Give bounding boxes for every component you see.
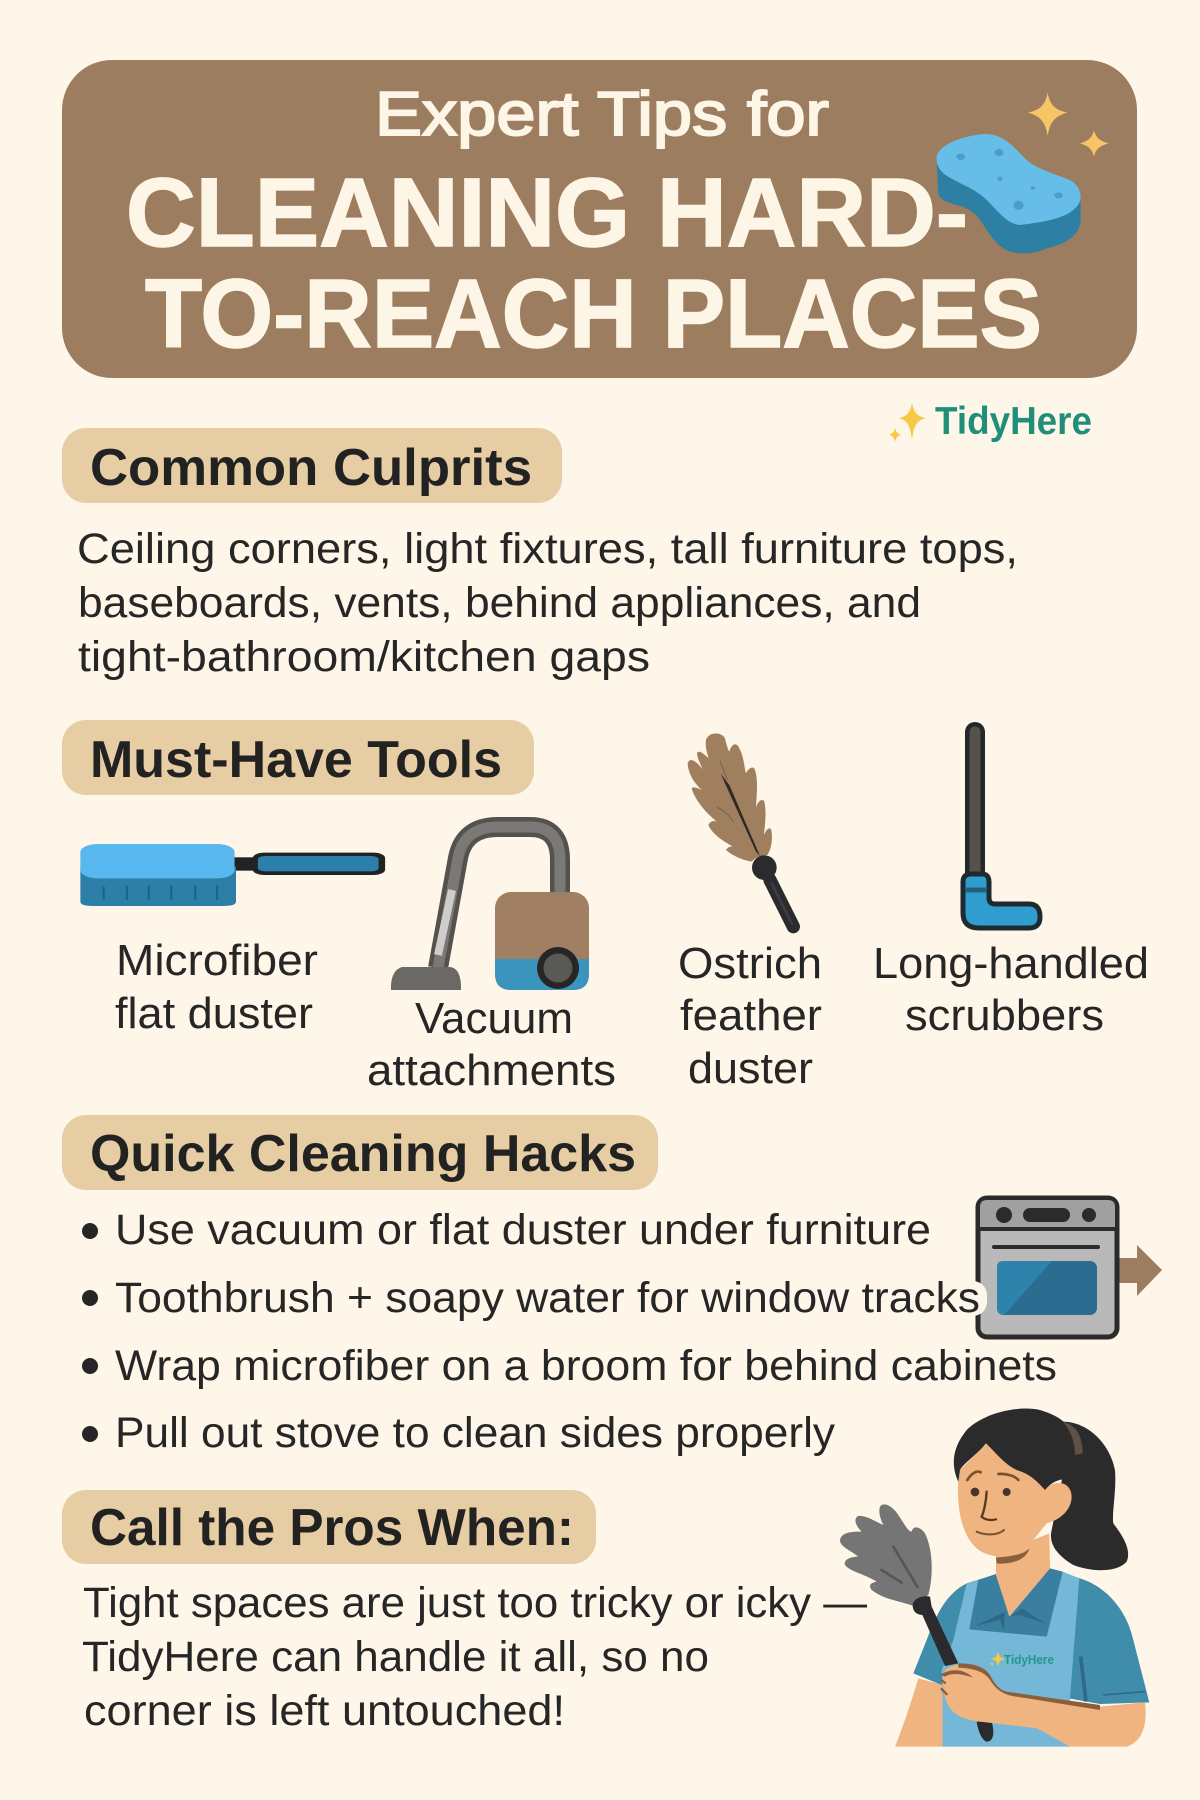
panel: quick cleaning hacks (62, 1115, 1162, 1457)
text: culprits list: Ceiling corners, light fixtures, tall furniture tops, (77, 525, 1018, 573)
title banner (62, 60, 1137, 378)
icon: oven with arrow (978, 1198, 1162, 1337)
text: call the pros body: Tight spaces are just too tricky or icky — (83, 1579, 867, 1627)
logo: TidyHere: TidyHere (935, 400, 1092, 443)
illustration: cleaner with feather duster (840, 1409, 1149, 1747)
list: quick hacks: Use vacuum or flat duster under furniture (115, 1206, 931, 1254)
text: culprits list: tight-bathroom/kitchen gaps (78, 633, 650, 681)
heading: common culprits (62, 428, 562, 503)
heading: quick cleaning hacks: Quick Cleaning Hacks (90, 1125, 636, 1183)
label: long-handled scrubbers (873, 939, 1149, 1040)
label: vacuum attachments: attachments (367, 1046, 616, 1095)
panel: call the pros (62, 1490, 867, 1735)
text: call the pros body: corner is left untouched! (84, 1687, 565, 1735)
label: microfiber flat duster (115, 936, 318, 1038)
title text (126, 80, 1042, 368)
label: vacuum attachments (367, 994, 616, 1095)
logo on apron: TidyHere (1004, 1652, 1054, 1667)
ponytail (1051, 1422, 1128, 1570)
heading: common culprits: Common Culprits (90, 439, 532, 497)
panel: common culprits (62, 428, 1018, 681)
icon: ostrich feather duster (688, 734, 793, 927)
label: long-handled scrubbers: scrubbers (905, 991, 1104, 1040)
list: quick hacks (82, 1206, 1057, 1457)
text: call the pros body: TidyHere can handle it all, so no (82, 1633, 709, 1681)
title text: TO-REACH PLACES (145, 259, 1042, 368)
head (954, 1409, 1083, 1564)
text: culprits list (77, 525, 1018, 681)
heading: call the pros: Call the Pros When: (90, 1499, 574, 1557)
label: ostrich feather duster (678, 939, 822, 1093)
title text: Expert Tips for (375, 80, 829, 149)
label: microfiber flat duster: Microfiber (116, 936, 318, 985)
icon: long-handled scrubber (963, 732, 1040, 928)
label: ostrich feather duster: Ostrich (678, 939, 822, 988)
label: ostrich feather duster: feather (680, 991, 822, 1040)
panel: must-have tools (62, 720, 1149, 1095)
text halo behind oven overlap (955, 1281, 987, 1316)
label: ostrich feather duster: duster (688, 1044, 813, 1093)
list: quick hacks: Wrap microfiber on a broom for behind cabinets (115, 1342, 1057, 1390)
title text: CLEANING HARD- (126, 158, 968, 267)
icon: microfiber flat duster (80, 844, 385, 906)
icon: vacuum (391, 827, 589, 990)
list: quick hacks: Pull out stove to clean sides properly (115, 1409, 836, 1457)
text: call the pros body (82, 1579, 867, 1735)
list: quick hacks: Toothbrush + soapy water for window tracks (115, 1274, 980, 1322)
text: culprits list: baseboards, vents, behind appliances, and (78, 579, 921, 627)
heading: must-have tools: Must-Have Tools (90, 731, 502, 789)
label: microfiber flat duster: flat duster (115, 989, 313, 1038)
icon: sponge with sparkles (937, 93, 1109, 253)
label: vacuum attachments: Vacuum (415, 994, 573, 1043)
label: long-handled scrubbers: Long-handled (873, 939, 1149, 988)
body and duster (840, 1504, 1149, 1747)
heading: must-have tools (62, 720, 534, 795)
